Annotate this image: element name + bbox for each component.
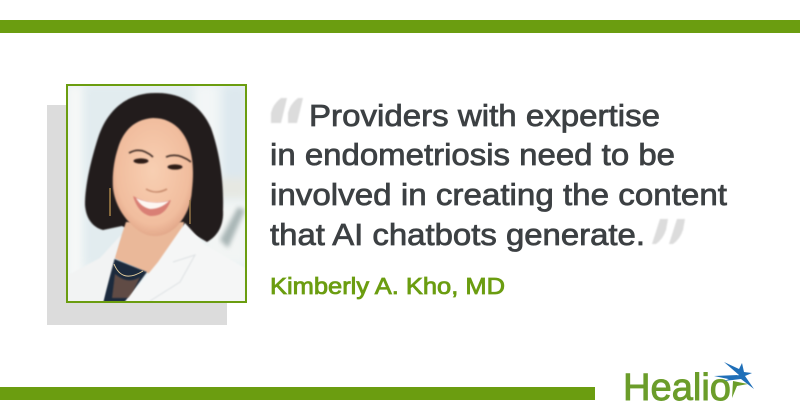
- quote text: Providers with expertise: [309, 98, 660, 133]
- bottom green bar: [0, 387, 595, 400]
- gray offset block behind portrait: [47, 105, 227, 325]
- earrings: [109, 188, 111, 216]
- smile: [133, 196, 171, 216]
- hair back: [85, 93, 223, 242]
- quote text: in endometriosis need to be: [270, 137, 675, 172]
- Healio logo: [623, 362, 754, 409]
- top green bar: [0, 20, 800, 33]
- closing quotation mark: [652, 219, 685, 244]
- attribution name: Kimberly A. Kho, MD: [270, 273, 505, 299]
- portrait photo: [68, 86, 247, 302]
- white coat: [86, 236, 121, 301]
- background equipment: [220, 207, 245, 248]
- eyes and brows: [129, 150, 191, 192]
- quote text: involved in creating the content: [270, 177, 727, 212]
- face: [113, 118, 193, 236]
- opening quotation mark: [271, 98, 303, 123]
- logo star: [714, 362, 754, 398]
- quote text: that AI chatbots generate.: [270, 217, 645, 252]
- dark blouse: [103, 258, 147, 302]
- portrait green frame: [67, 85, 246, 302]
- neck and chest: [114, 222, 184, 274]
- logo wordmark: Healio: [623, 367, 731, 409]
- quote text: [270, 98, 727, 252]
